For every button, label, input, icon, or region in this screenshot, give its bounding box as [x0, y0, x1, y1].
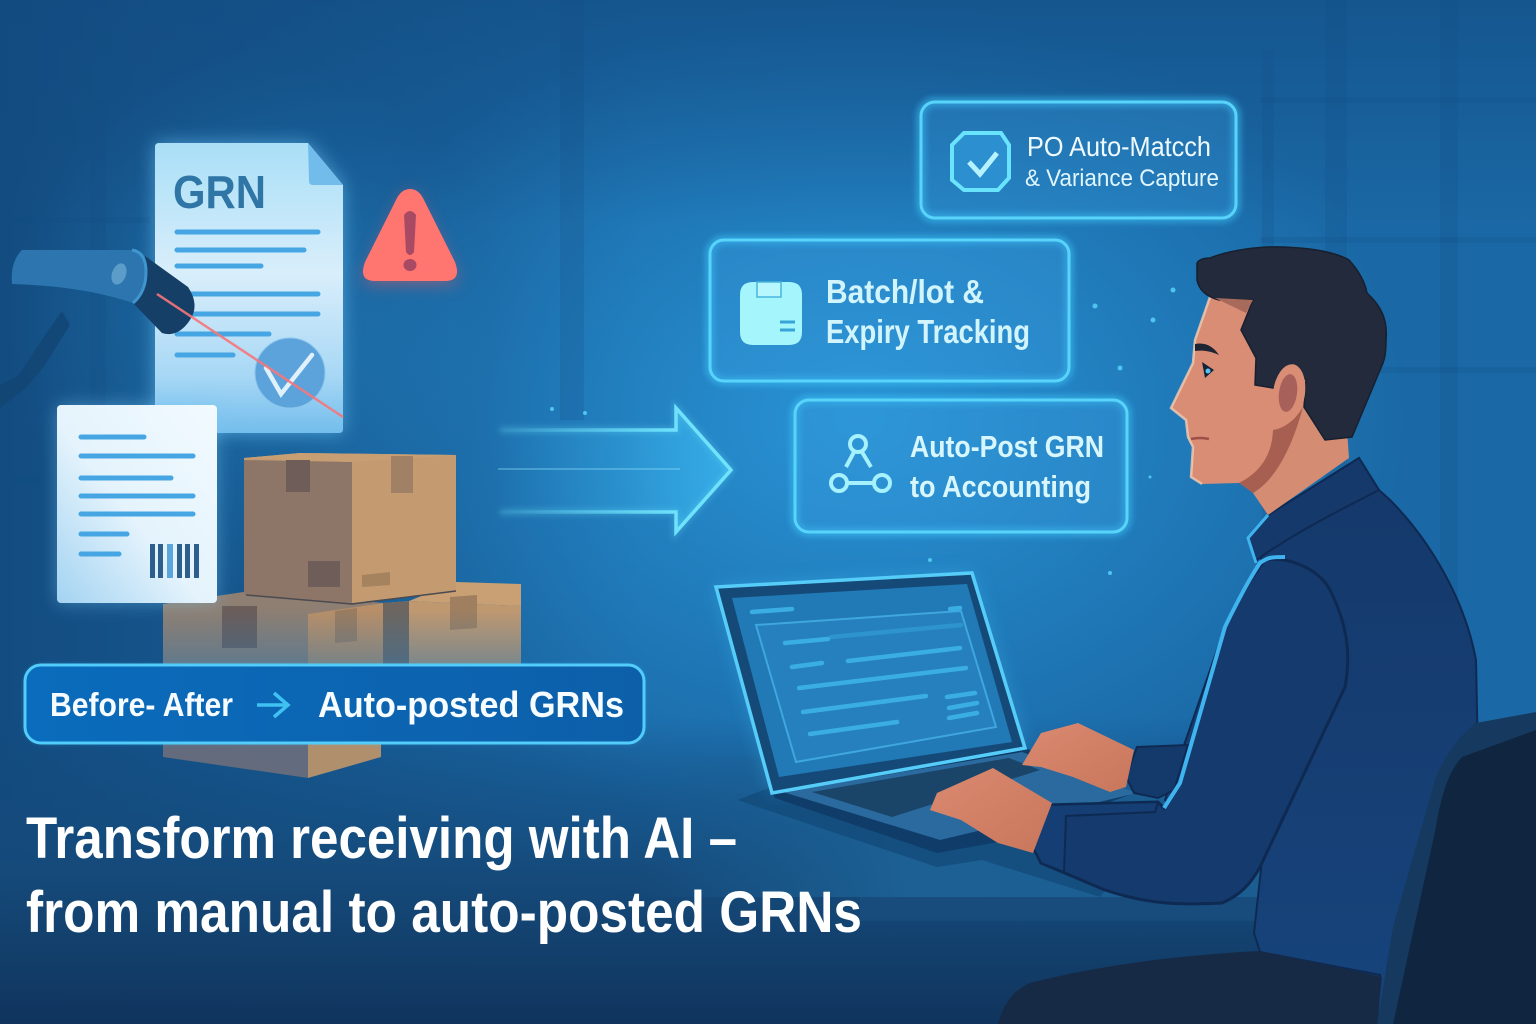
inner ear — [1276, 373, 1300, 413]
card: batch/lot tracking — [710, 240, 1069, 381]
laptop base — [772, 748, 1137, 853]
laptop screen — [716, 573, 1025, 793]
person at laptop — [930, 247, 1536, 1024]
verified check — [255, 338, 325, 408]
card: PO auto-match: PO Auto-Matcch — [1027, 131, 1211, 162]
icon: floppy save — [740, 282, 802, 345]
GRN label: GRN — [173, 166, 266, 218]
stacked cardboard boxes — [163, 453, 521, 778]
icon: network nodes — [831, 436, 890, 491]
collar — [1248, 458, 1379, 562]
forehead shadow — [1215, 298, 1253, 313]
torso — [1165, 458, 1478, 1024]
collar highlight — [1248, 515, 1268, 563]
lower right box — [383, 582, 521, 665]
jaw shadow — [1239, 407, 1303, 493]
headline: from manual to auto-posted GRNs — [26, 880, 862, 945]
warning triangle icon — [362, 189, 458, 282]
barcode — [150, 544, 199, 578]
card: PO auto-match — [921, 102, 1236, 218]
far hand — [1022, 723, 1134, 792]
card: PO auto-match: & Variance Capture — [1025, 165, 1219, 192]
face — [1171, 297, 1310, 484]
lower box below banner — [163, 744, 381, 778]
card: auto-post GRN: to Accounting — [910, 469, 1091, 504]
eye and brow — [1191, 343, 1219, 439]
trousers — [998, 951, 1382, 1024]
scanner stand — [0, 311, 70, 408]
laptop — [716, 573, 1137, 853]
lower left box — [163, 591, 384, 665]
laptop shadow — [737, 780, 1150, 897]
barcode scanner — [12, 250, 195, 334]
profile highlight — [1171, 297, 1210, 484]
chair — [1377, 712, 1536, 1024]
top box — [244, 453, 456, 604]
floating particles — [550, 288, 1176, 575]
scanner laser — [157, 294, 343, 417]
far cuff — [1126, 745, 1188, 798]
before-after banner — [25, 665, 644, 743]
desk — [640, 757, 1536, 921]
icon: check octagon — [952, 133, 1009, 190]
near hand — [930, 768, 1052, 853]
hair — [1197, 247, 1386, 440]
card: batch/lot tracking: Batch/lot & — [826, 273, 984, 310]
before-after banner: Auto-posted GRNs — [318, 684, 624, 725]
headline — [26, 806, 862, 945]
neck — [1253, 400, 1349, 515]
card: auto-post GRN — [795, 400, 1127, 532]
near cuff — [1032, 802, 1158, 872]
ear — [1269, 362, 1309, 424]
before-after banner: Before- After — [50, 686, 233, 723]
sleeve highlight — [1164, 557, 1285, 808]
headline: Transform receiving with AI – — [26, 806, 737, 871]
banner arrow — [257, 693, 288, 717]
paper receipt document — [57, 405, 217, 603]
card: batch/lot tracking: Expiry Tracking — [826, 313, 1030, 350]
laptop screen lines — [752, 608, 977, 734]
card: auto-post GRN: Auto-Post GRN — [910, 429, 1104, 464]
transformation arrow — [495, 408, 731, 532]
GRN document — [155, 143, 343, 433]
near arm — [1032, 559, 1348, 904]
